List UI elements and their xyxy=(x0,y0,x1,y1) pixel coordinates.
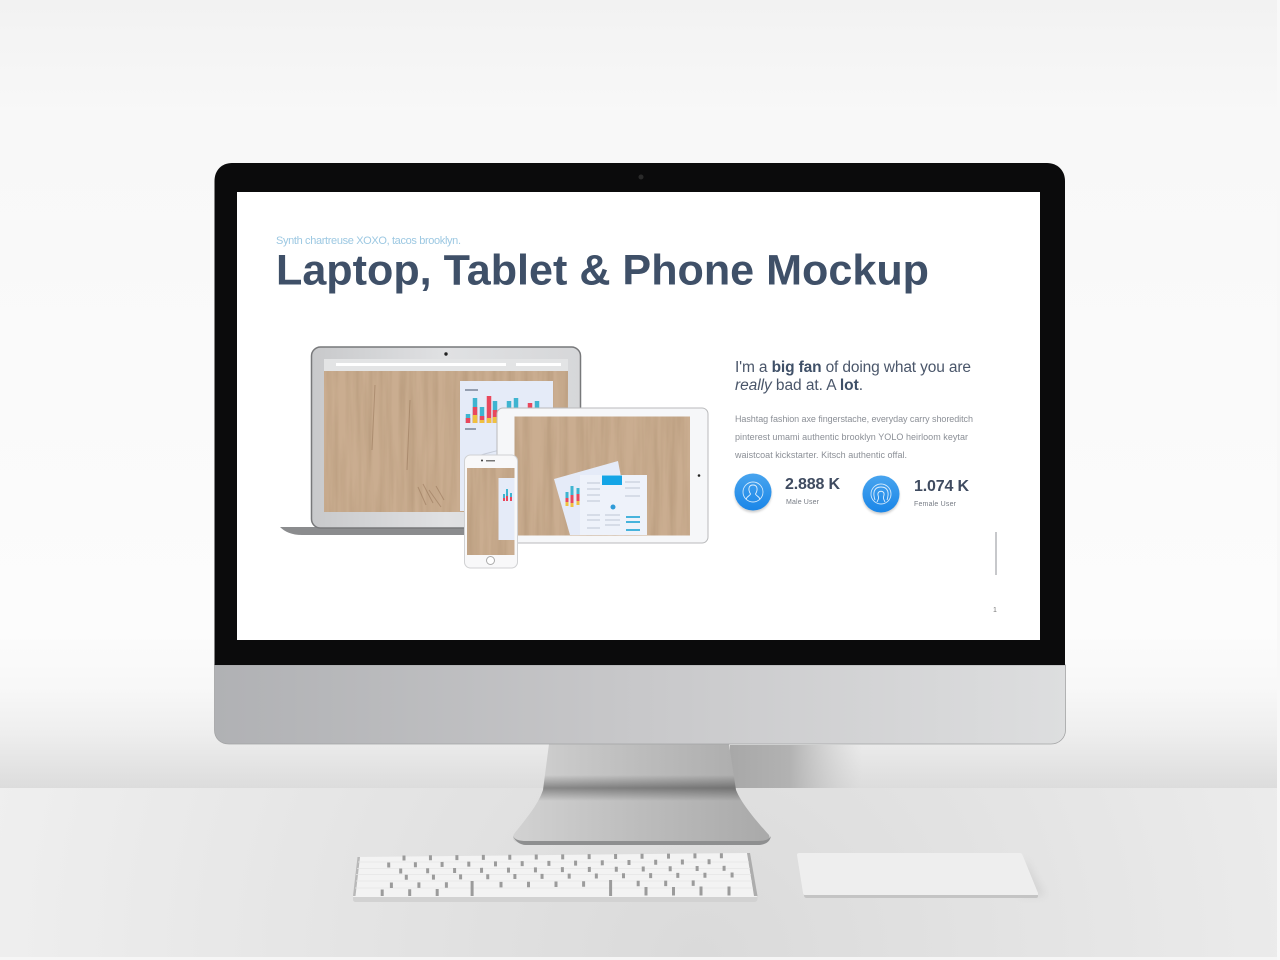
stat: male user xyxy=(734,474,840,512)
label: Female User xyxy=(914,501,957,508)
monitor chin xyxy=(214,665,1066,744)
phone xyxy=(464,455,518,568)
monitor stand xyxy=(510,744,775,845)
icon: female user xyxy=(862,476,900,514)
screen xyxy=(237,192,1040,640)
keyboard xyxy=(353,853,758,902)
headline text block: I'm a big fan of doing what you are xyxy=(735,359,971,376)
stat: female user xyxy=(862,476,969,514)
label: Male User xyxy=(786,499,820,506)
body text block xyxy=(734,414,973,460)
body text block: waistcoat kickstarter. Kitsch authentic offal. xyxy=(734,450,907,460)
headline text block xyxy=(735,359,971,394)
body text block: Hashtag fashion axe fingerstache, everyday carry shoreditch xyxy=(735,414,973,424)
monitor bezel xyxy=(214,163,1065,665)
webcam xyxy=(638,174,644,180)
tablet documents xyxy=(554,461,647,535)
headline text block: really bad at. A lot. xyxy=(735,377,863,394)
icon: male user xyxy=(734,474,772,512)
body text block: pinterest umami authentic brooklyn YOLO heirloom keytar xyxy=(735,432,968,442)
value: 2.888 K xyxy=(785,476,840,493)
value: 1.074 K xyxy=(914,478,969,495)
subtitle: Synth chartreuse XOXO, tacos brooklyn. xyxy=(276,235,461,247)
laptop document with bar chart xyxy=(460,381,553,511)
tablet xyxy=(497,408,708,543)
page number: 1 xyxy=(993,607,997,614)
trackpad xyxy=(797,853,1046,898)
device mockups xyxy=(280,347,708,568)
monitor xyxy=(214,163,1066,744)
title: Laptop, Tablet & Phone Mockup xyxy=(276,246,929,294)
laptop xyxy=(280,347,580,535)
